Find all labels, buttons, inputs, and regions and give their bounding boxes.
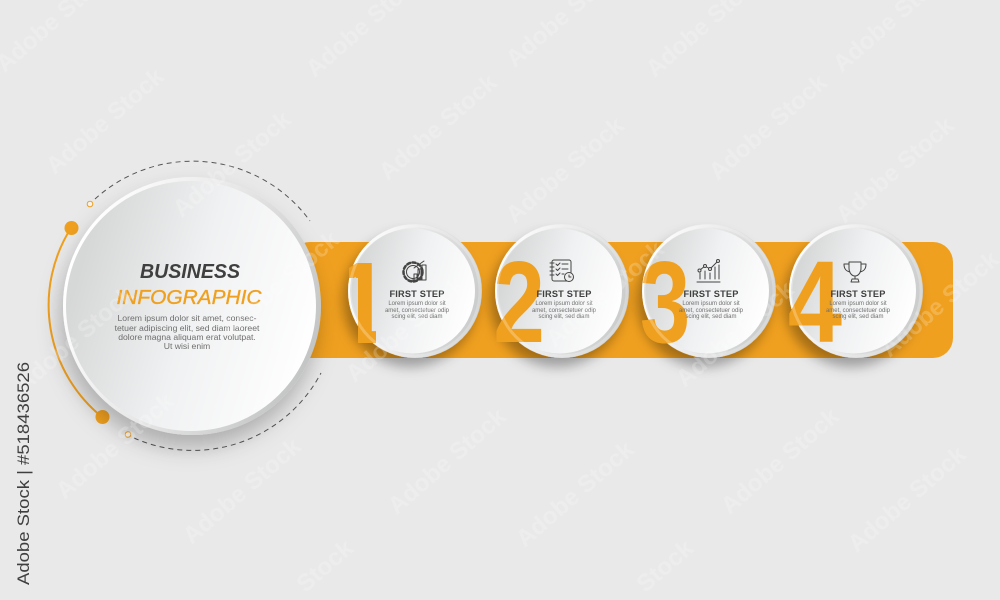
panel: main circle (63, 177, 321, 435)
step text: scing elit, sed diam (685, 314, 737, 320)
side credit text: Adobe Stock | #518436526 (14, 362, 33, 585)
panel: step 1 (329, 224, 482, 368)
watermarks: Adobe Stock (11, 281, 140, 398)
step text: amet, consectetuer odip (826, 308, 891, 314)
heading: business: BUSINESS (140, 261, 241, 283)
step text: Lorem ipsum dolor sit (829, 301, 887, 307)
step title: FIRST STEP (683, 289, 739, 299)
icon: checklist (550, 260, 574, 282)
number 3: 3 (640, 238, 690, 368)
step text: Lorem ipsum dolor sit (535, 301, 593, 307)
icon: line chart (697, 260, 720, 282)
watermarks: Adobe Stock (541, 236, 670, 353)
watermarks: Stock (632, 534, 699, 598)
step text (679, 301, 744, 320)
watermarks: Adobe Stock (704, 69, 833, 186)
watermarks: Adobe Stock (671, 276, 800, 393)
number 2: 2 (493, 238, 545, 367)
step text: amet, consectetuer odip (532, 308, 597, 314)
body text (115, 313, 260, 351)
step text (385, 301, 450, 320)
panel: step 2 (493, 224, 629, 367)
orange arc with end dots (49, 221, 110, 424)
step text (532, 301, 597, 320)
icon: gear with chart (404, 261, 426, 282)
watermarks: Adobe Stock (374, 69, 503, 186)
number 1: 1 (329, 238, 393, 368)
step text: scing elit, sed diam (538, 314, 590, 320)
watermarks: Adobe Stock (716, 403, 845, 520)
number 4: 4 (788, 237, 842, 367)
body text: tetuer adipiscing elit, sed diam laoreet (115, 323, 260, 333)
body text: Ut wisi enim (164, 341, 210, 351)
watermarks: Adobe Stock (843, 441, 972, 558)
panel: step 3 (640, 224, 776, 368)
watermarks: Adobe Stock (51, 388, 180, 505)
watermarks: Adobe Stock (511, 436, 640, 553)
dashed arc top (95, 161, 310, 221)
icon: trophy (844, 262, 866, 282)
orange bar (290, 242, 953, 358)
heading: infographic: INFOGRAPHIC (116, 287, 262, 309)
step text: scing elit, sed diam (391, 314, 443, 320)
step text: scing elit, sed diam (832, 314, 884, 320)
dashed arc bottom (134, 373, 321, 450)
watermarks: Adobe Stock (168, 106, 297, 223)
step title: FIRST STEP (389, 289, 445, 299)
watermarks: Adobe Stock (831, 112, 960, 229)
step text: amet, consectetuer odip (385, 308, 450, 314)
step text: Lorem ipsum dolor sit (388, 301, 446, 307)
watermarks: Adobe Stock (178, 433, 307, 550)
watermarks: Adobe Stock (341, 271, 470, 388)
step title: FIRST STEP (830, 289, 886, 299)
step text: Lorem ipsum dolor sit (682, 301, 740, 307)
step title: FIRST STEP (536, 289, 592, 299)
step text (826, 301, 891, 320)
body text: dolore magna aliquam erat volutpat. (118, 332, 256, 342)
small ring top (87, 201, 93, 207)
watermarks: Adobe Stock (41, 63, 170, 180)
body text: Lorem ipsum dolor sit amet, consec- (117, 313, 257, 323)
watermarks: Adobe Stock (501, 112, 630, 229)
step text: amet, consectetuer odip (679, 308, 744, 314)
watermarks: Adobe Stock (383, 403, 512, 520)
watermarks: Stock (292, 534, 359, 598)
small ring bottom (125, 432, 131, 437)
watermarks: Adobe Stock (216, 226, 345, 343)
panel: step 4 (788, 224, 923, 367)
